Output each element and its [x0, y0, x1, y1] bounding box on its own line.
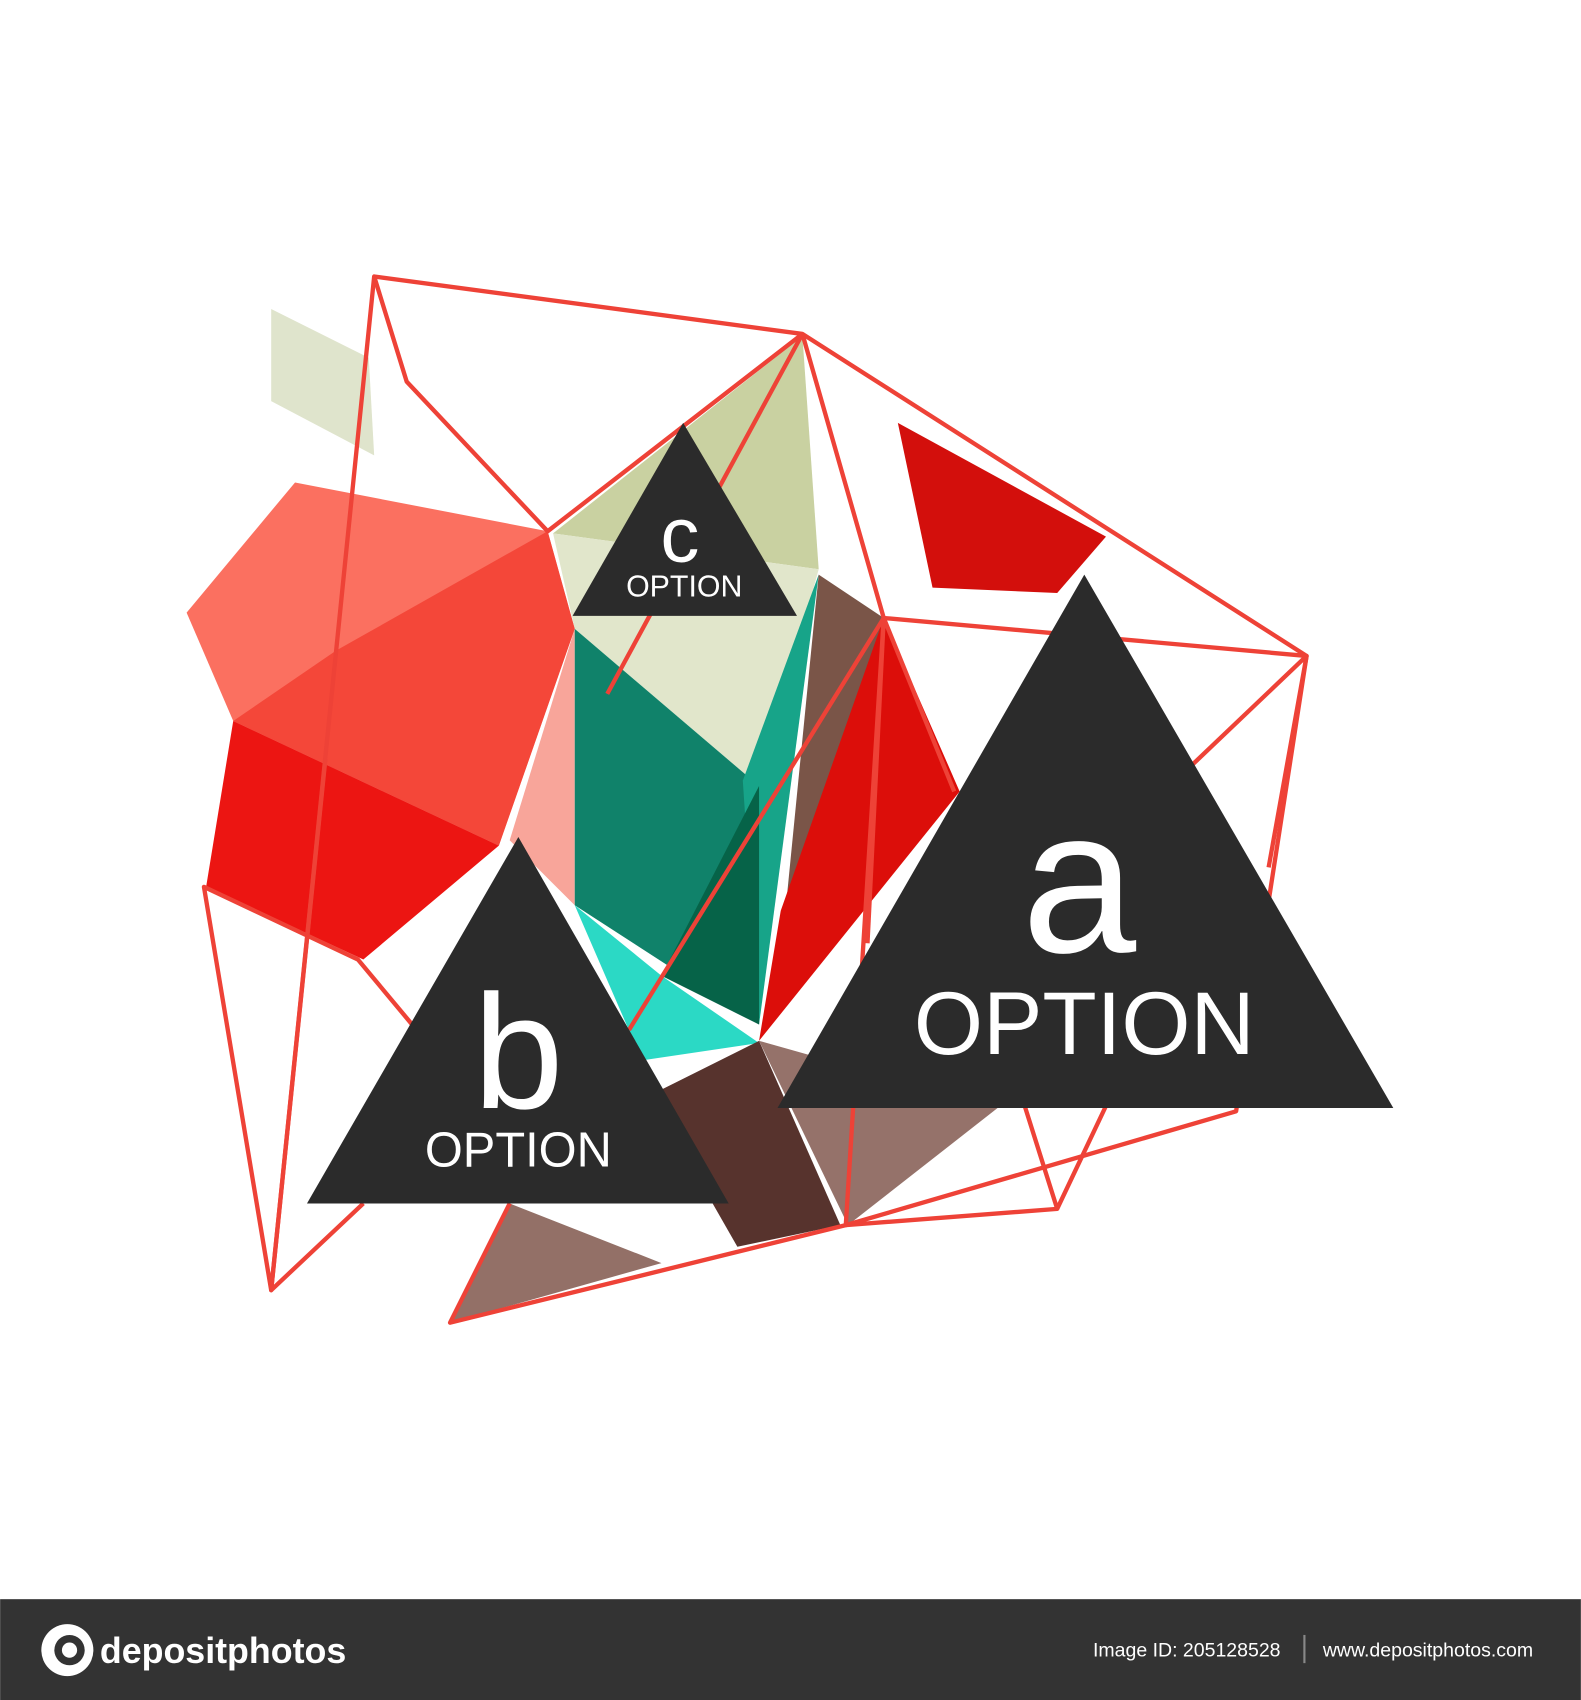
shape: dark brown	[651, 1041, 840, 1247]
shape: olive triangle	[553, 336, 819, 569]
image id: Image ID: 205128528	[1093, 1640, 1281, 1662]
logo text: depositphotos	[100, 1631, 346, 1671]
shape: dark red	[206, 721, 499, 960]
triangle: option b: OPTION	[425, 1124, 612, 1178]
shape: pink strip	[510, 629, 575, 905]
shape: bottom brown triangle	[450, 1203, 661, 1323]
triangle: option c	[573, 423, 797, 616]
triangle: option c: c	[660, 491, 699, 579]
triangle: option a	[777, 575, 1393, 1108]
footer bar	[0, 1599, 1581, 1700]
wireframe: red outline	[204, 276, 1307, 1323]
shape: teal	[743, 575, 819, 1025]
shape: red tile	[898, 423, 1106, 593]
shape: salmon pentagon	[187, 482, 575, 846]
shape: cyan	[575, 905, 759, 1060]
shape: dark green	[661, 786, 759, 1025]
triangle: option b: b	[473, 962, 564, 1143]
shape: red pentagon	[233, 531, 575, 846]
shape: light olive parallelogram	[271, 309, 374, 455]
triangle: option a: a	[1022, 766, 1137, 996]
triangle: option c: OPTION	[626, 570, 742, 603]
triangle: option b	[307, 837, 729, 1203]
icon: depositphotos logo	[41, 1624, 93, 1676]
shape: green	[575, 629, 759, 1025]
graphic: polygon composition	[187, 276, 1393, 1323]
triangle: option a: OPTION	[914, 974, 1255, 1073]
shape: light olive region	[553, 533, 819, 786]
shape: brown	[775, 575, 884, 1014]
shape: mid brown	[759, 1041, 998, 1225]
shape: red right	[759, 618, 960, 1041]
website url: www.depositphotos.com	[1322, 1640, 1533, 1662]
